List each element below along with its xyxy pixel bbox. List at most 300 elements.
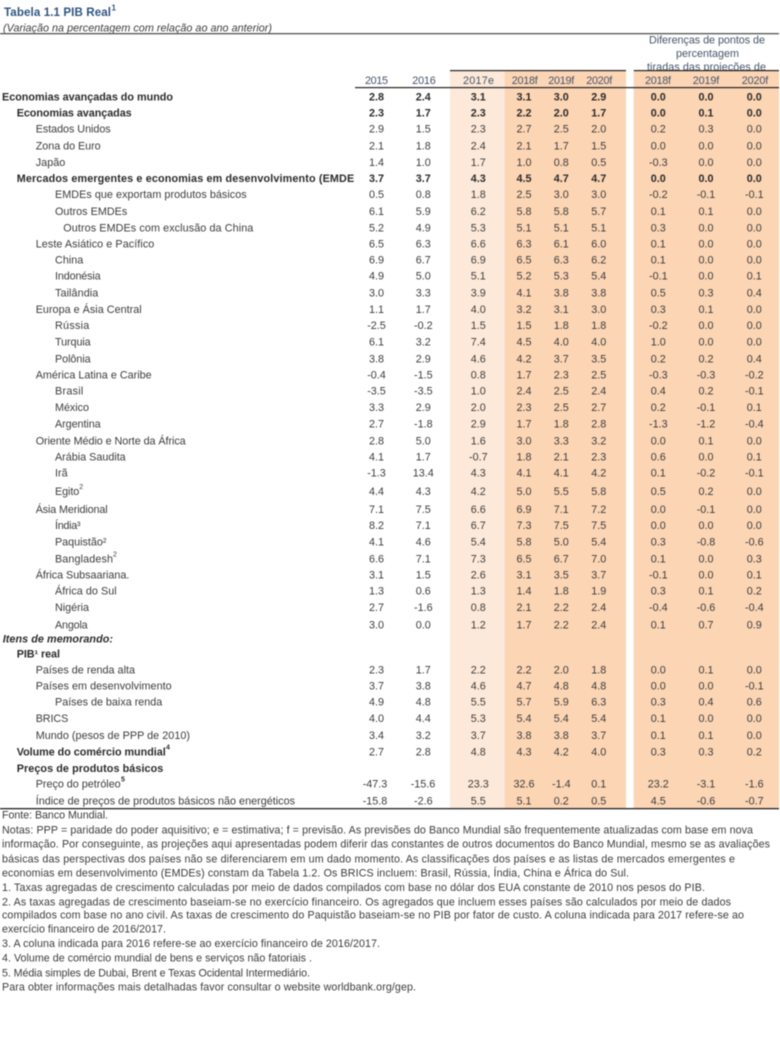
row: Preço do petróleo: 23.2 (648, 779, 669, 791)
row: Países de baixa renda: 0.6 (747, 697, 762, 709)
row: Índice de preços de produtos básicos não energéticos: 0.2 (554, 796, 569, 808)
row: Mercados emergentes e economias em desenvolvimento: 0.0 (651, 173, 666, 185)
row: Turquia: Turquia (55, 336, 91, 348)
row: Países de baixa renda: 4.8 (416, 697, 431, 709)
row: Tailândia: 3.8 (591, 288, 606, 300)
column headers: 2020f (586, 75, 613, 87)
row: Bangladesh: 7.3 (471, 553, 486, 565)
row: Angola: 0.9 (747, 619, 762, 631)
row: Leste Asiático e Pacífico: 6.3 (416, 238, 431, 250)
row: Índia: 7.3 (516, 520, 532, 532)
row: Estados Unidos: 0.3 (698, 123, 714, 135)
row: Paquistão: 5.8 (516, 536, 532, 548)
row: Estados Unidos: 2.5 (554, 123, 569, 135)
row: Indonésia: 5.0 (416, 271, 431, 283)
row: Europa e Ásia Central: 0.0 (747, 304, 762, 316)
row: África do Sul: 0.1 (698, 586, 714, 598)
row: Economias avançadas: 1.7 (416, 107, 431, 119)
row: Egito: 5.8 (591, 486, 606, 498)
row: Outros EMDEs (55, 206, 762, 218)
row: Países de baixa renda: 5.9 (554, 697, 569, 709)
row: Arábia Saudita: 2.1 (554, 451, 569, 463)
row: México: México (55, 402, 89, 414)
row: África do Sul: 1.3 (369, 586, 384, 598)
row: Preço do petróleo: 0.1 (591, 779, 606, 791)
row: China: 6.9 (471, 254, 486, 266)
row: Indonésia (55, 271, 762, 283)
row: Oriente Médio e Norte da África: 3.0 (516, 435, 532, 447)
row: Economias avançadas do mundo: 2.4 (416, 91, 431, 103)
row: Indonésia: 5.2 (516, 271, 532, 283)
row: Angola: Angola (55, 619, 88, 631)
row: Irã (55, 468, 764, 480)
row: Índice de preços de produtos básicos não energéticos: Índice de preços de produtos básicos não energéticos (36, 795, 296, 808)
row: Turquia: 6.1 (369, 336, 384, 348)
row: México: 2.5 (554, 402, 569, 414)
row: Europa e Ásia Central: 4.0 (471, 304, 486, 316)
row: Economias avançadas do mundo: 0.0 (651, 91, 666, 103)
row: Europa e Ásia Central: 0.1 (698, 304, 714, 316)
row: Mercados emergentes e economias em desenvolvimento: 0.0 (747, 173, 762, 185)
row: Mundo (pesos de PPP de 2010): 3.7 (471, 730, 486, 742)
row: Europa e Ásia Central: 3.2 (516, 304, 532, 316)
row: Rússia: -2.5 (367, 320, 386, 332)
row: México: 3.3 (369, 402, 384, 414)
row: EMDEs que exportam produtos básicos: -0.1 (697, 189, 715, 201)
row: Brasil: Brasil (55, 386, 83, 398)
row: Nigéria: -1.6 (414, 602, 433, 614)
row: México: 0.1 (747, 402, 762, 414)
row: Volume do comércio mundial: 0.3 (698, 746, 714, 758)
row: Outros EMDEs com exclusão da China: 5.1 (516, 222, 532, 234)
row: México: -0.1 (697, 402, 715, 414)
row: Polônia: 4.6 (471, 353, 486, 365)
row: Brasil: 0.2 (698, 386, 714, 398)
row: África do Sul: África do Sul (55, 585, 117, 598)
row: Índia (55, 519, 762, 532)
row: Países de baixa renda: 5.5 (471, 697, 486, 709)
row: África Subsaariana: 3.1 (369, 570, 384, 582)
row: Indonésia: 0.1 (747, 271, 762, 283)
row: Mercados emergentes e economias em desenvolvimento: 4.7 (591, 173, 606, 185)
row: Nigéria: 2.4 (591, 602, 606, 614)
row: Oriente Médio e Norte da África: Oriente Médio e Norte da África (36, 434, 186, 447)
row: Rússia: -0.2 (649, 320, 668, 332)
row: Egito: 0.2 (698, 486, 714, 498)
row: Paquistão: 5.4 (591, 536, 606, 548)
row: Turquia: 3.2 (416, 336, 431, 348)
row: Oriente Médio e Norte da África (36, 434, 762, 447)
column headers: 2018f (512, 75, 539, 87)
title: 1 (112, 4, 116, 12)
row: Nigéria: 2.1 (516, 602, 532, 614)
row: África do Sul: 1.4 (516, 586, 532, 598)
row: Rússia: 0.0 (747, 320, 762, 332)
row: Índia: 7.5 (591, 520, 606, 532)
row: Outros EMDEs: 0.1 (698, 206, 714, 218)
row: América Latina e Caribe: -0.3 (697, 370, 715, 382)
row: Indonésia: 5.1 (471, 271, 486, 283)
row: Outros EMDEs com exclusão da China: 0.0 (698, 222, 714, 234)
row: Países em desenvolvimento: 3.8 (416, 681, 431, 693)
row: China (55, 254, 762, 266)
row: Países em desenvolvimento: 4.7 (516, 681, 532, 693)
row: Preço do petróleo: 32.6 (513, 779, 535, 791)
row: Outros EMDEs com exclusão da China: Outros EMDEs com exclusão da China (63, 222, 253, 234)
row: Países de renda alta: 0.0 (651, 664, 666, 676)
column headers (365, 75, 769, 87)
row: América Latina e Caribe: 2.3 (554, 370, 569, 382)
row: Nigéria: 2.2 (554, 602, 569, 614)
row: América Latina e Caribe: -0.3 (649, 370, 668, 382)
row: México: 2.7 (591, 402, 606, 414)
row: México: 0.2 (651, 402, 666, 414)
row: Irã: 13.4 (413, 468, 434, 480)
row: África Subsaariana (36, 569, 762, 582)
row: Países de renda alta: 2.2 (516, 664, 532, 676)
row: Angola: 1.2 (471, 619, 486, 631)
row: Preço do petróleo: -1.6 (745, 779, 764, 791)
row: EMDEs que exportam produtos básicos: 2.5 (516, 189, 532, 201)
row: BRICS: 5.4 (591, 713, 606, 725)
row: África do Sul: 1.9 (591, 586, 606, 598)
row: Ásia Meridional: -0.1 (697, 504, 715, 516)
row: Oriente Médio e Norte da África: 5.0 (416, 435, 431, 447)
row: Oriente Médio e Norte da África: 0.0 (747, 435, 762, 447)
row: América Latina e Caribe: América Latina e Caribe (36, 370, 152, 382)
row: Estados Unidos: 0.0 (747, 123, 762, 135)
row: Brasil: 2.4 (591, 386, 606, 398)
row: África Subsaariana: 3.5 (554, 570, 569, 582)
row: Brasil: 1.0 (471, 386, 486, 398)
row: Brasil: 2.4 (516, 386, 532, 398)
row: Mercados emergentes e economias em desenvolvimento: Mercados emergentes e economias em desenvolvimento (EMDE (17, 173, 354, 185)
column headers: 2018f (645, 75, 672, 87)
row: Polônia: 3.5 (591, 353, 606, 365)
row: Indonésia: 4.9 (369, 271, 384, 283)
row: Polônia: 2.9 (416, 353, 431, 365)
row: Estados Unidos: 2.0 (591, 123, 606, 135)
row: Egito: 0.5 (651, 486, 666, 498)
row: Turquia: 4.0 (591, 336, 606, 348)
row: Irã: -0.1 (745, 468, 764, 480)
row: Índia: 6.7 (471, 520, 486, 532)
row: Turquia: 4.5 (516, 336, 532, 348)
row: Índice de preços de produtos básicos não energéticos: 0.5 (591, 796, 606, 808)
row: EMDEs que exportam produtos básicos: -0.2 (649, 189, 668, 201)
row: Japão: 1.4 (369, 157, 384, 169)
column headers: 2020f (742, 75, 769, 87)
column headers: 2015 (365, 75, 388, 87)
row: Leste Asiático e Pacífico: 6.3 (516, 238, 532, 250)
row: Irã: 4.1 (516, 468, 532, 480)
row: Argentina: -1.3 (649, 418, 668, 430)
row: Polônia: 3.8 (369, 353, 384, 365)
row: Egito: 4.2 (471, 486, 486, 498)
row: Outros EMDEs com exclusão da China (63, 222, 762, 234)
row: Turquia: 0.0 (747, 336, 762, 348)
row: Mercados emergentes e economias em desenvolvimento: 3.7 (369, 173, 384, 185)
row: Estados Unidos: 0.2 (651, 123, 666, 135)
row: África do Sul: 0.6 (416, 586, 431, 598)
row: Bangladesh: 7.0 (591, 553, 606, 565)
row: Países de renda alta: 0.0 (747, 664, 762, 676)
row: Índia: 7.5 (554, 520, 569, 532)
row: Países de renda alta (36, 664, 762, 676)
row: Outros EMDEs com exclusão da China: 0.0 (747, 222, 762, 234)
row: Economias avançadas: 0.0 (747, 107, 762, 119)
row: Economias avançadas (17, 107, 762, 119)
row: Países em desenvolvimento: 4.8 (554, 681, 569, 693)
row: África Subsaariana: África Subsaariana. (36, 569, 129, 582)
row: BRICS (36, 713, 762, 725)
row: Tailândia: 0.4 (747, 288, 762, 300)
row: Índice de preços de produtos básicos não energéticos: -15.8 (363, 796, 387, 808)
row: Rússia (55, 320, 762, 332)
row: Angola: 1.7 (516, 619, 532, 631)
row: Brasil: 2.5 (554, 386, 569, 398)
row: China: 6.9 (369, 254, 384, 266)
row: Paquistão: 4.6 (416, 536, 431, 548)
row: Indonésia: Indonésia (55, 271, 101, 283)
notes block: 5. Média simples de Dubai, Brent e Texas Ocidental Intermediário. (2, 967, 310, 979)
row: Volume do comércio mundial: 4.8 (471, 746, 486, 758)
row: Outros EMDEs: 5.8 (554, 206, 569, 218)
row: Indonésia: 5.3 (554, 271, 569, 283)
row: Tailândia: Tailândia (55, 288, 98, 300)
row: Mercados emergentes e economias em desenvolvimento (17, 173, 762, 185)
row: Oriente Médio e Norte da África: 0.0 (651, 435, 666, 447)
row: Angola: 2.4 (591, 619, 606, 631)
row: Índia: 7.1 (416, 520, 431, 532)
row: Arábia Saudita: 4.1 (369, 451, 384, 463)
notes block: Fonte: Banco Mundial. (2, 810, 108, 822)
row: Volume do comércio mundial: Volume do comércio mundial (17, 746, 166, 758)
notes block: Notas: PPP = paridade do poder aquisitivo; e = estimativa; f = previsão. As previsões do Banco Mundial são frequentemente atualizadas com base em nova (2, 825, 753, 837)
row: Argentina: 1.7 (516, 418, 532, 430)
header: spanning label for forecast differences: percentagem (676, 48, 739, 60)
row: Países de renda alta: 1.7 (416, 664, 431, 676)
row: Irã: 4.3 (471, 468, 486, 480)
row: Polônia: 0.2 (651, 353, 666, 365)
row: Preço do petróleo: 5 (121, 777, 125, 784)
row: China: 0.0 (747, 254, 762, 266)
row: Oriente Médio e Norte da África: 3.2 (591, 435, 606, 447)
row: Estados Unidos (36, 123, 762, 135)
row: Arábia Saudita: 0.0 (698, 451, 714, 463)
row: Irã: -1.3 (367, 468, 386, 480)
row: México (55, 402, 762, 414)
row: Economias avançadas: 1.7 (591, 107, 606, 119)
row: Paquistão: 5.4 (471, 536, 486, 548)
header: spanning label for forecast differences: tiradas das projeções de (647, 62, 766, 74)
row: Leste Asiático e Pacífico (36, 238, 762, 250)
row: Argentina (55, 418, 764, 430)
row: Argentina: -0.4 (745, 418, 764, 430)
row: Outros EMDEs: 6.2 (471, 206, 486, 218)
row: Arábia Saudita (55, 451, 762, 463)
row: Japão: 0.0 (747, 157, 762, 169)
row: Mundo (pesos de PPP de 2010): 0.1 (698, 730, 714, 742)
row: Ásia Meridional (36, 503, 762, 516)
row: Polônia: 3.7 (554, 353, 569, 365)
row: Tailândia: 3.8 (554, 288, 569, 300)
row: Bangladesh: 0.1 (651, 553, 666, 565)
row: Japão: 1.0 (516, 157, 532, 169)
row: BRICS: 5.4 (516, 713, 532, 725)
row: Países em desenvolvimento: Países em desenvolvimento (36, 681, 172, 693)
subtitle: (Variação na percentagem com relação ao ano anterior) (3, 22, 272, 34)
row: Paquistão: 0.3 (651, 536, 666, 548)
row: Polônia: 4.2 (516, 353, 532, 365)
row: Leste Asiático e Pacífico: 0.1 (651, 238, 666, 250)
row: Leste Asiático e Pacífico: 6.6 (471, 238, 486, 250)
row: Japão: -0.3 (649, 157, 668, 169)
row: Turquia (55, 336, 762, 348)
row: Economias avançadas: Economias avançadas (17, 107, 132, 119)
row: Tailândia: 0.5 (651, 288, 666, 300)
row: Economias avançadas: 2.3 (471, 107, 486, 119)
row: Países de renda alta: Países de renda alta (36, 664, 135, 676)
row: Ásia Meridional: 7.2 (591, 504, 606, 516)
row: Bangladesh: 6.5 (516, 553, 532, 565)
row: Economias avançadas: 2.0 (554, 107, 569, 119)
row: Paquistão: 4.1 (369, 536, 384, 548)
row: Arábia Saudita: Arábia Saudita (55, 451, 126, 463)
row: Ásia Meridional: 7.1 (369, 504, 384, 516)
row: Países de baixa renda (55, 697, 762, 709)
row: Economias avançadas do mundo: 3.1 (516, 91, 532, 103)
row: África Subsaariana: 1.5 (416, 570, 431, 582)
row: Indonésia: 5.4 (591, 271, 606, 283)
row: Outros EMDEs: 5.8 (516, 206, 532, 218)
row: Arábia Saudita: 1.7 (416, 451, 431, 463)
notes block: Para obter informações mais detalhadas favor consultar o website worldbank.org/gep. (2, 981, 416, 993)
row: Economias avançadas: 2.3 (369, 107, 384, 119)
row: Arábia Saudita: 1.8 (516, 451, 532, 463)
row: EMDEs que exportam produtos básicos: 0.8 (416, 189, 431, 201)
header: spanning label for forecast differences: Diferenças de pontos de (649, 34, 765, 46)
row: Europa e Ásia Central: 3.0 (591, 304, 606, 316)
row: Oriente Médio e Norte da África: 2.8 (369, 435, 384, 447)
row: Mercados emergentes e economias em desenvolvimento: 0.0 (698, 173, 714, 185)
row: México: 2.0 (471, 402, 486, 414)
row: Argentina: 1.8 (554, 418, 569, 430)
row: Polônia (55, 353, 762, 365)
row: Economias avançadas do mundo: 3.1 (471, 91, 486, 103)
row: América Latina e Caribe: 2.5 (591, 370, 606, 382)
row: Turquia: 7.4 (471, 336, 486, 348)
row: BRICS: BRICS (36, 713, 68, 725)
row: Países de renda alta: 2.3 (369, 664, 384, 676)
row: EMDEs que exportam produtos básicos: 3.0 (554, 189, 569, 201)
row: Preço do petróleo: Preço do petróleo (36, 779, 121, 791)
row: Ásia Meridional: 7.5 (416, 504, 431, 516)
row: Brasil (55, 386, 764, 398)
row: Preço do petróleo: -1.4 (552, 779, 571, 791)
row: Egito (55, 484, 762, 498)
row: Mundo (pesos de PPP de 2010): Mundo (pesos de PPP de 2010) (36, 730, 190, 742)
row: Volume do comércio mundial: 4.3 (516, 746, 532, 758)
row: Nigéria: 2.7 (369, 602, 384, 614)
row: Tailândia: 3.0 (369, 288, 384, 300)
row: Indonésia: -0.1 (649, 271, 668, 283)
row: Zona do Euro: 0.0 (747, 141, 762, 153)
row: Países de baixa renda: 4.9 (369, 697, 384, 709)
row: BRICS: 0.0 (747, 713, 762, 725)
row: Mundo (pesos de PPP de 2010): 3.8 (554, 730, 569, 742)
row: Leste Asiático e Pacífico: 0.0 (698, 238, 714, 250)
row: Leste Asiático e Pacífico: 0.0 (747, 238, 762, 250)
row: Brasil: -3.5 (414, 386, 433, 398)
row: Economias avançadas do mundo: 3.0 (554, 91, 569, 103)
row: Oriente Médio e Norte da África: 3.3 (554, 435, 569, 447)
row: Europa e Ásia Central: 0.3 (651, 304, 666, 316)
row: Economias avançadas do mundo: 0.0 (698, 91, 714, 103)
row: Mercados emergentes e economias em desenvolvimento: 4.7 (554, 173, 569, 185)
row: Europa e Ásia Central: Europa e Ásia Central (36, 303, 142, 316)
row: Mundo (pesos de PPP de 2010): 3.8 (516, 730, 532, 742)
row: Tailândia: 3.9 (471, 288, 486, 300)
row: Egito: Egito (55, 486, 79, 498)
column headers: 2019f (693, 75, 720, 87)
row: Mundo (pesos de PPP de 2010): 3.7 (591, 730, 606, 742)
row: BRICS: 4.4 (416, 713, 431, 725)
row: Oriente Médio e Norte da África: 1.6 (471, 435, 486, 447)
row: Europa e Ásia Central: 1.1 (369, 304, 384, 316)
row: Paquistão: -0.6 (745, 536, 764, 548)
row: Preço do petróleo (36, 777, 764, 791)
column band: 2017 estimate (450, 71, 505, 808)
row: Economias avançadas do mundo: 0.0 (747, 91, 762, 103)
row: Egito: 0.0 (747, 486, 762, 498)
row: Rússia: 1.8 (591, 320, 606, 332)
row: África Subsaariana: 0.0 (698, 570, 714, 582)
row: Arábia Saudita: 0.6 (651, 451, 666, 463)
notes block: exercício financeiro de 2016/2017. (2, 924, 166, 936)
row: Mundo (pesos de PPP de 2010) (36, 730, 762, 742)
row: Europa e Ásia Central (36, 303, 762, 316)
row: Tailândia: 3.3 (416, 288, 431, 300)
row: Zona do Euro: 1.8 (416, 141, 431, 153)
row: Brasil: -0.1 (745, 386, 764, 398)
row: Outros EMDEs com exclusão da China: 5.1 (554, 222, 569, 234)
notes block: 2. As taxas agregadas de crescimento baseiam-se no exercício financeiro. Os agregados que incluem esses países são calculados por meio de dados (2, 896, 731, 908)
row: Arábia Saudita: 0.1 (747, 451, 762, 463)
row: África Subsaariana: 0.1 (747, 570, 762, 582)
row: África Subsaariana: -0.1 (649, 570, 668, 582)
row: México: 2.9 (416, 402, 431, 414)
row: América Latina e Caribe: -1.5 (414, 370, 433, 382)
row: Turquia: 4.0 (554, 336, 569, 348)
row: Países de baixa renda: 5.7 (516, 697, 532, 709)
row: Nigéria: -0.4 (649, 602, 668, 614)
row: Outros EMDEs: 6.1 (369, 206, 384, 218)
row: África do Sul (55, 585, 762, 598)
column headers: 2017e (463, 75, 494, 87)
row: Bangladesh: 2 (113, 551, 117, 558)
row: Volume do comércio mundial: 2.8 (416, 746, 431, 758)
row: Angola: 3.0 (369, 619, 384, 631)
row: Irã: -0.2 (697, 468, 715, 480)
row: Angola: 2.2 (554, 619, 569, 631)
row: Bangladesh (55, 551, 762, 565)
row: Nigéria: Nigéria (55, 602, 89, 614)
row: Turquia: 0.0 (698, 336, 714, 348)
row: Índia: Índia³ (55, 519, 81, 532)
notes block: 4. Volume de comércio mundial de bens e serviços não fatoriais . (2, 953, 312, 965)
row: Economias avançadas: 2.2 (516, 107, 532, 119)
